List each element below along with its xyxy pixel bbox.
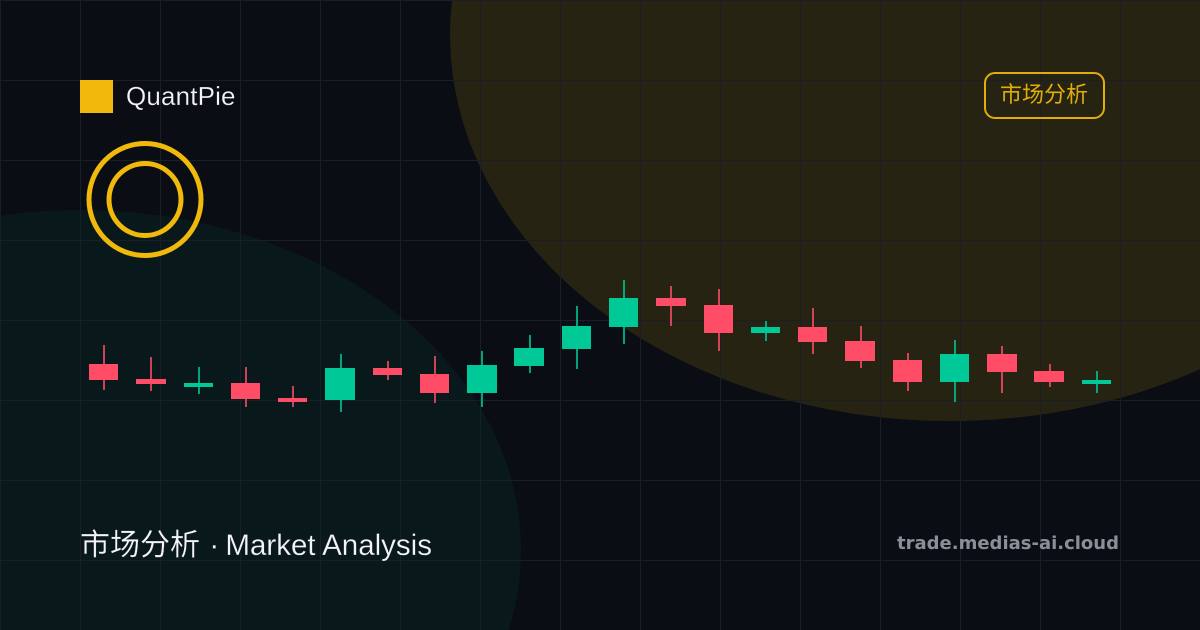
concentric ring icon [89,144,201,256]
title: 市场分析 [80,529,200,562]
title: · [209,529,228,562]
yellow background blob [450,0,1200,421]
logo mark [80,80,113,113]
site url: trade.medias-ai.cloud [897,533,1119,554]
brand name: QuantPie [126,81,236,111]
badge: market analysis: 市场分析 [1000,82,1088,107]
teal background blob [0,210,521,630]
badge: market analysis [985,73,1104,118]
candlestick chart [89,280,1111,412]
title: Market Analysis [225,529,432,562]
